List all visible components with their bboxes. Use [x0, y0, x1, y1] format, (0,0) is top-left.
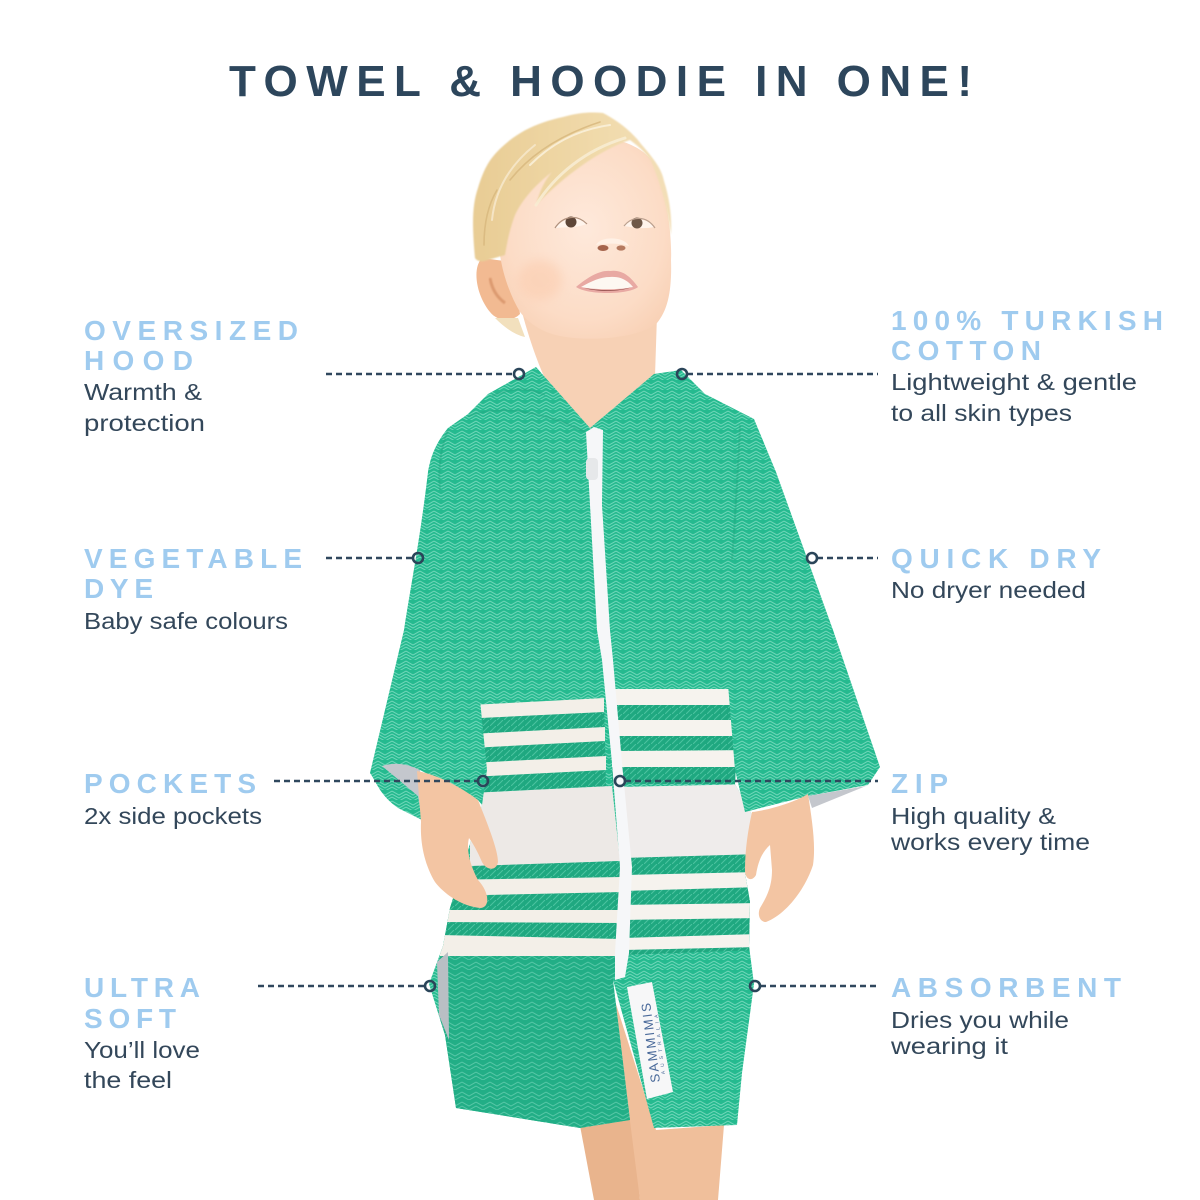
callout: ultra soft: You’ll love — [84, 1037, 200, 1063]
callout: absorbent: ABSORBENT — [891, 972, 1121, 1003]
right hand — [745, 794, 814, 922]
robe body with stripes — [428, 367, 760, 1128]
callout: oversized hood: protection — [84, 410, 205, 436]
neck — [522, 312, 657, 432]
hair — [473, 112, 671, 261]
pointer: vegetable dye — [326, 553, 423, 563]
callout: ultra soft: the feel — [84, 1067, 172, 1093]
cheek blush — [518, 260, 562, 300]
right sleeve lining — [808, 786, 866, 808]
brand tag — [627, 982, 673, 1099]
callout: vegetable dye: VEGETABLE — [84, 543, 302, 574]
callout: zip: High quality & — [891, 803, 1056, 829]
back of left sleeve lining — [382, 762, 424, 812]
callout: pockets: POCKETS — [84, 768, 256, 799]
callout: turkish cotton: to all skin types — [891, 400, 1072, 426]
left hand — [417, 771, 498, 908]
legs — [578, 985, 724, 1200]
callout: zip: works every time — [890, 829, 1090, 855]
callout: pockets: 2x side pockets — [84, 803, 262, 829]
mouth — [576, 271, 638, 293]
ear — [476, 258, 520, 320]
callout: oversized hood: OVERSIZED — [84, 315, 298, 346]
title: TOWEL & HOODIE IN ONE! — [229, 57, 972, 106]
pointer: turkish cotton — [677, 369, 878, 379]
head — [473, 112, 671, 339]
loose hair at nape — [495, 318, 525, 337]
pointer: zip — [615, 776, 878, 786]
zipper — [586, 427, 632, 980]
brand tag: AUSTRALIA — [654, 1014, 667, 1074]
callout: quick dry: QUICK DRY — [891, 543, 1101, 574]
right sleeve — [726, 419, 880, 812]
nose — [598, 245, 608, 251]
callout: ultra soft: SOFT — [84, 1003, 176, 1034]
callout: ultra soft — [84, 972, 200, 1093]
pointer: ultra soft — [258, 981, 435, 991]
left eye — [555, 218, 586, 228]
seam lines — [439, 389, 740, 560]
illustration: child wearing hooded towel — [370, 112, 880, 1200]
callout: turkish cotton — [891, 305, 1163, 426]
left sleeve — [370, 428, 487, 820]
callout: quick dry — [891, 543, 1101, 603]
callout: absorbent — [890, 972, 1121, 1059]
zipper pull — [586, 458, 598, 480]
callout: turkish cotton: COTTON — [891, 335, 1041, 366]
pointer: pockets — [274, 776, 488, 786]
callout: zip: ZIP — [891, 768, 948, 799]
right panel stripes — [612, 705, 736, 784]
callout: ultra soft: ULTRA — [84, 972, 200, 1003]
callout: vegetable dye: Baby safe colours — [84, 608, 288, 634]
left panel stripes — [470, 698, 606, 793]
callout: absorbent: Dries you while — [891, 1007, 1069, 1033]
callout: oversized hood: HOOD — [84, 345, 193, 376]
hair strands — [484, 122, 625, 245]
callout: absorbent: wearing it — [890, 1033, 1009, 1059]
callout: zip — [890, 768, 1090, 855]
callout: vegetable dye: DYE — [84, 573, 153, 604]
callout: pockets — [84, 768, 262, 829]
callout: quick dry: No dryer needed — [891, 577, 1086, 603]
pointer: absorbent — [750, 981, 878, 991]
face — [500, 138, 671, 339]
right eye — [624, 219, 654, 228]
callout: turkish cotton: 100% TURKISH — [891, 305, 1163, 336]
callout: vegetable dye — [84, 543, 302, 634]
callout: oversized hood: Warmth & — [84, 379, 202, 405]
pocket lining — [437, 952, 449, 1040]
callout: oversized hood — [84, 315, 298, 436]
brand tag: SAMMIMIS — [638, 1002, 663, 1083]
pointer: quick dry — [807, 553, 878, 563]
pointer: oversized hood — [326, 369, 524, 379]
callout: turkish cotton: Lightweight & gentle — [891, 369, 1137, 395]
